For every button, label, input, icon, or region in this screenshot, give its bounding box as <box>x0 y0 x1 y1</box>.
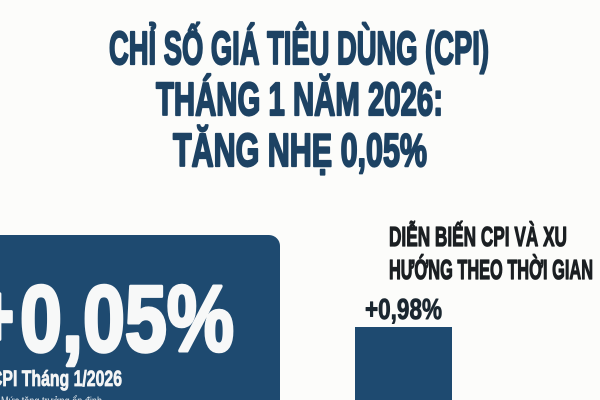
chart heading <box>389 221 593 285</box>
bar <box>355 327 452 400</box>
bar value: +0,98% <box>365 294 442 326</box>
title <box>109 22 489 176</box>
panel: headline CPI figure <box>0 235 280 400</box>
big number: 0,05% <box>20 266 234 371</box>
title: TĂNG NHẸ 0,05% <box>173 124 427 176</box>
title: THÁNG 1 NĂM 2026: <box>156 73 443 125</box>
bar chart <box>355 294 452 400</box>
